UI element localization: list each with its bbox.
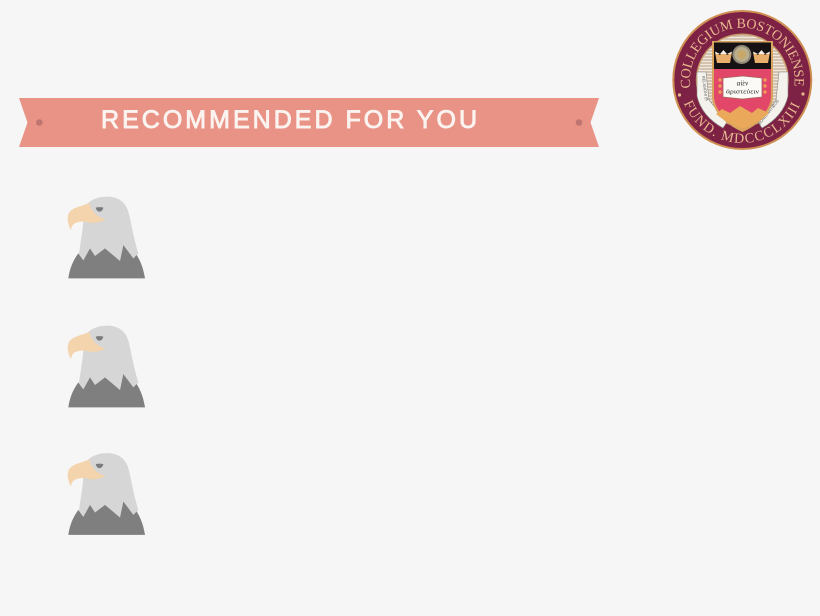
banner heading: RECOMMENDED FOR YOU (101, 106, 477, 134)
icon: eagle 2 (68, 326, 145, 407)
seal open book (723, 76, 762, 99)
seal open book: αἰὲν (737, 80, 748, 88)
seal lettering: FUND. MDCCCLXIII (684, 100, 800, 143)
icon: university seal (672, 10, 812, 150)
banner ribbon (19, 98, 599, 147)
seal lettering: COLLEGIUM BOSTONIENSE (680, 18, 804, 88)
seal stripes (698, 35, 786, 106)
icon: eagle 1 (68, 197, 145, 278)
banner: recommended for you (19, 98, 599, 147)
icon: university seal: RELIGIONI ET (702, 76, 708, 101)
seal shield (712, 41, 773, 132)
seal crowns and sun (715, 51, 732, 63)
banner right pin (576, 119, 582, 126)
banner left pin (36, 119, 43, 126)
seal open book: ἀριστεύειν (726, 88, 759, 96)
seal side ornaments (718, 78, 767, 94)
seal mountains (716, 106, 769, 129)
icon: university seal: BONIS ARTIBUS (758, 100, 779, 125)
seal lettering (680, 18, 804, 143)
seal dots (678, 93, 681, 97)
icon: eagle 3 (68, 453, 145, 535)
seal ribbons (697, 72, 727, 128)
